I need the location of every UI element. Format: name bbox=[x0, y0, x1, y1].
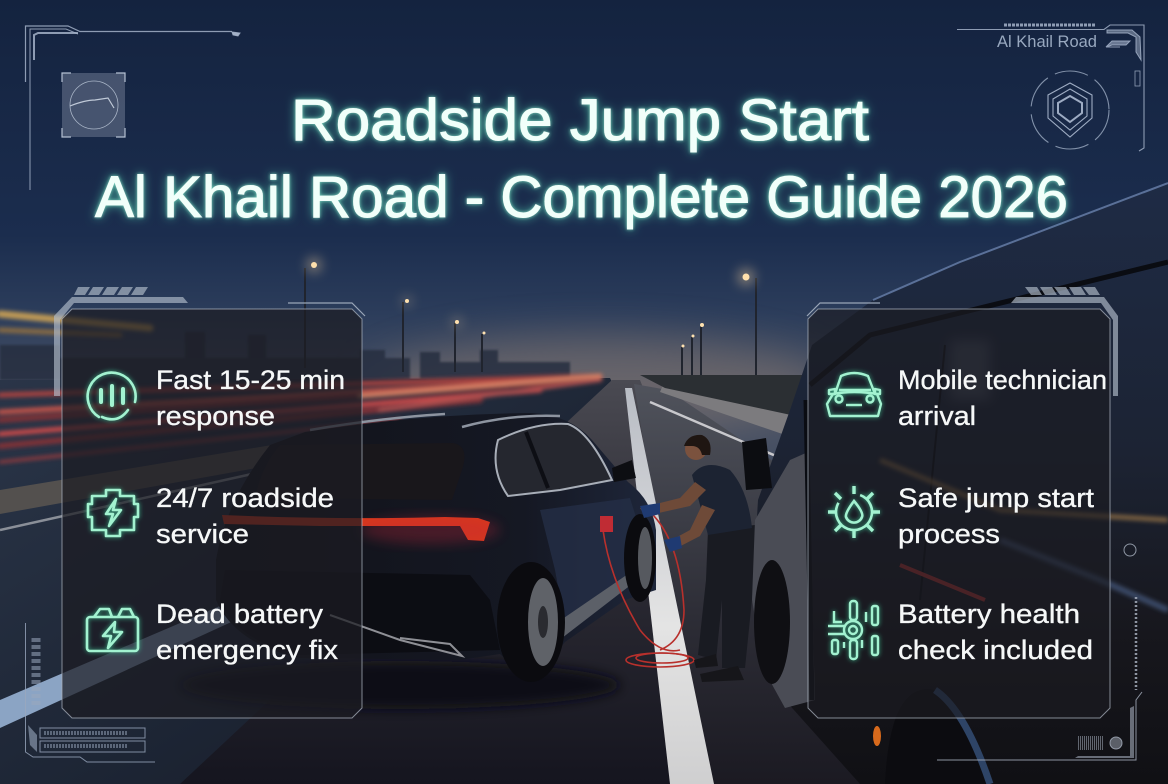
HUD map badge bbox=[62, 73, 125, 137]
icon: gear with drop bbox=[828, 486, 880, 538]
icon: circuit node bbox=[828, 601, 878, 659]
amber reflection bbox=[880, 460, 1168, 520]
label text: process bbox=[898, 519, 1000, 549]
rear wheel arch bbox=[885, 689, 990, 784]
rear wheel bbox=[497, 562, 565, 682]
icon: chip with bolt bbox=[88, 490, 138, 536]
concrete barrier bbox=[0, 442, 290, 514]
panel: right features bbox=[807, 287, 1118, 718]
label text: Mobile technician bbox=[898, 365, 1107, 395]
arms bbox=[640, 482, 715, 550]
label text: emergency fix bbox=[156, 635, 339, 665]
item: Dead battery emergency fix bbox=[87, 599, 339, 665]
left lane marking bbox=[0, 470, 275, 728]
central white lane line bbox=[625, 388, 714, 784]
thin corner line bbox=[288, 303, 365, 316]
panel: left features bbox=[54, 287, 365, 718]
van front wheel bbox=[754, 560, 790, 684]
label text: Safe jump start bbox=[898, 483, 1095, 513]
item: Fast 15-25 min response bbox=[88, 365, 345, 431]
SUV bbox=[180, 413, 656, 709]
head bbox=[685, 438, 707, 460]
label text: Fast 15-25 min bbox=[156, 365, 345, 395]
van window frame bbox=[806, 262, 1168, 700]
body side reflection bbox=[540, 498, 640, 625]
motion light trails bbox=[0, 314, 600, 462]
HUD top-left corner frame bbox=[26, 26, 240, 190]
left carriageway bbox=[0, 378, 640, 784]
roof rails bbox=[310, 414, 560, 430]
street lamps bbox=[305, 258, 756, 392]
red clamp box bbox=[600, 516, 613, 532]
panel card bbox=[62, 309, 362, 718]
boots bbox=[694, 654, 744, 682]
HUD location label: Al Khail Road bbox=[997, 32, 1097, 51]
roof highlight bbox=[873, 183, 1168, 300]
label text: service bbox=[156, 519, 249, 549]
legs bbox=[698, 525, 755, 668]
HUD top-right corner frame bbox=[957, 25, 1144, 151]
label text: response bbox=[156, 401, 275, 431]
SUV body bbox=[216, 413, 656, 682]
marker lights bbox=[873, 726, 881, 746]
front wheel bbox=[624, 514, 656, 602]
panel card bbox=[808, 309, 1110, 718]
icon: battery with bolt bbox=[87, 609, 138, 651]
HUD shield emblem bbox=[1031, 71, 1109, 149]
service van bbox=[742, 183, 1168, 784]
main road surface bbox=[180, 380, 800, 784]
label text: arrival bbox=[898, 401, 976, 431]
city skyline bbox=[0, 332, 570, 383]
horizon glow bbox=[370, 335, 830, 435]
item: Safe jump start process bbox=[828, 483, 1095, 549]
label text: check included bbox=[898, 635, 1093, 665]
jumper cable bbox=[600, 512, 694, 667]
icon: car front bbox=[827, 373, 881, 416]
technician bbox=[640, 435, 755, 682]
van side mirror bbox=[742, 438, 772, 490]
panel top bracket bbox=[1011, 287, 1118, 396]
item: Mobile technician arrival bbox=[827, 365, 1107, 431]
side windows bbox=[496, 424, 612, 496]
torso bbox=[692, 465, 752, 535]
SUV shadow bbox=[180, 661, 620, 709]
running board bbox=[558, 574, 632, 638]
item: Battery health check included bbox=[828, 599, 1093, 665]
panel top bracket bbox=[54, 287, 188, 396]
thin corner line bbox=[807, 303, 880, 316]
right carriageway and barrier bbox=[634, 375, 860, 784]
van body bbox=[752, 183, 1168, 784]
HUD bottom-right frame bbox=[937, 544, 1142, 760]
HUD bottom-left frame bbox=[26, 623, 155, 762]
label text: 24/7 roadside bbox=[156, 483, 334, 513]
item: 24/7 roadside service bbox=[88, 483, 334, 549]
taillight bar bbox=[222, 515, 490, 541]
gloves bbox=[640, 503, 682, 552]
van front pale side bbox=[752, 452, 815, 708]
taillight glow bbox=[360, 516, 500, 544]
title line 1: Roadside Jump Start bbox=[291, 88, 869, 153]
rear window bbox=[255, 443, 464, 500]
title bbox=[95, 88, 1068, 230]
title line 2: Al Khail Road - Complete Guide 2026 bbox=[95, 165, 1068, 230]
side mirror bbox=[612, 460, 636, 482]
label text: Battery health bbox=[898, 599, 1080, 629]
lower bumper bbox=[220, 570, 500, 655]
label text: Dead battery bbox=[156, 599, 324, 629]
van window reflection bbox=[950, 340, 990, 400]
icon: timer gauge bbox=[88, 373, 136, 419]
